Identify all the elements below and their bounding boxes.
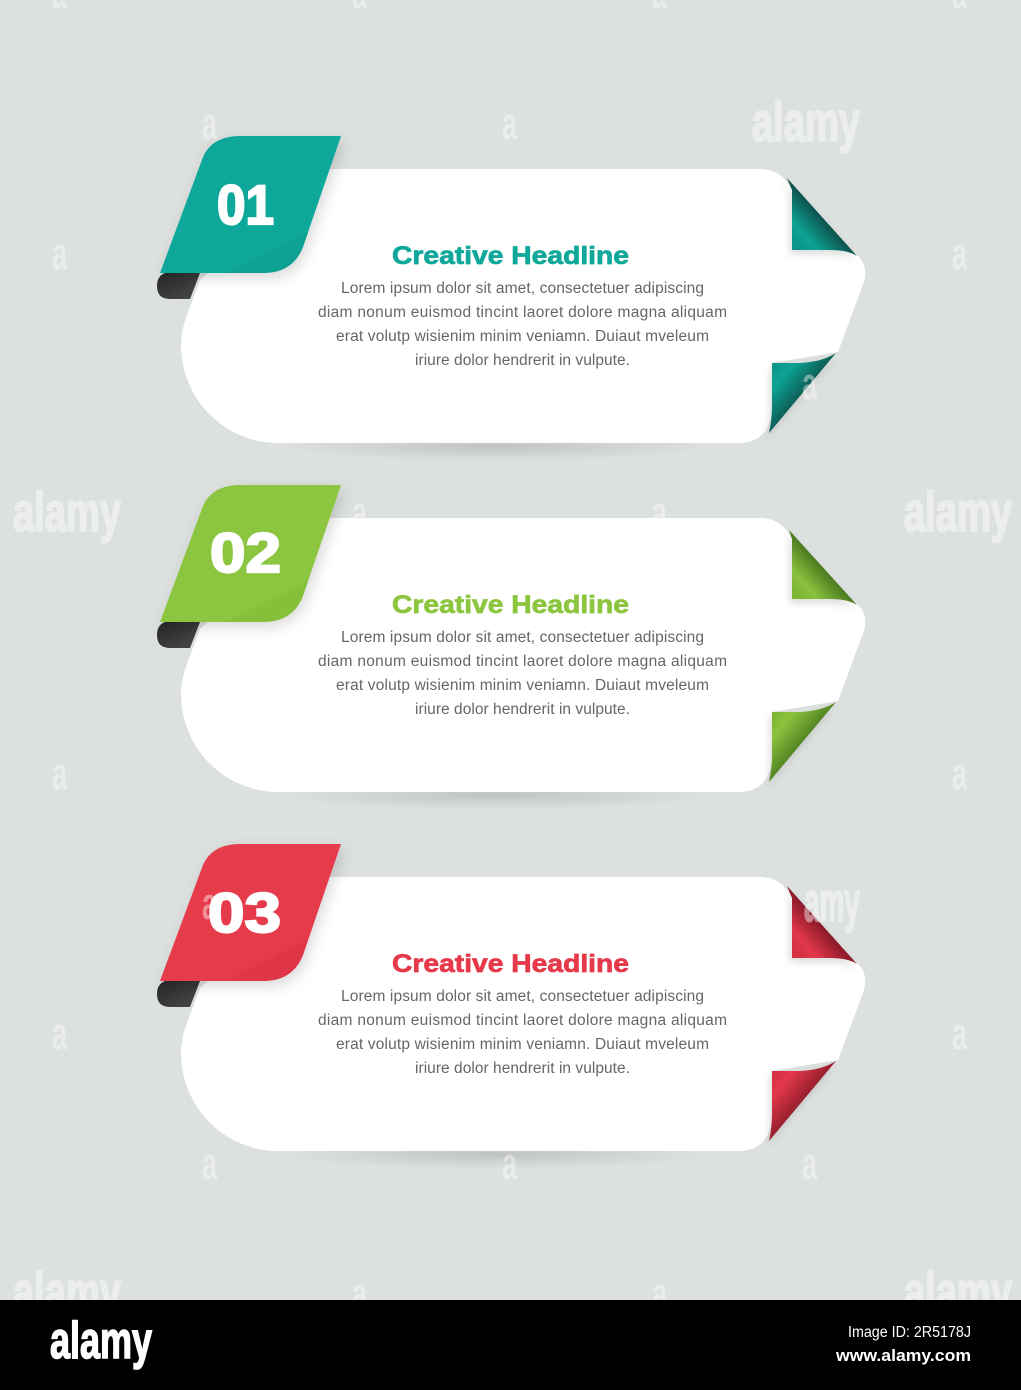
watermarks: a [202, 98, 218, 149]
body text: diam nonum euismod tincint laoret dolore magna aliquam [318, 304, 727, 321]
page curl bottom [769, 353, 836, 433]
white card [181, 518, 865, 792]
number label: 03 [208, 881, 281, 944]
heading: Creative Headline [392, 242, 629, 270]
body text: Lorem ipsum dolor sit amet, consectetuer adipiscing [341, 629, 704, 646]
watermarks: a [502, 1138, 518, 1189]
body text: diam nonum euismod tincint laoret dolore magna aliquam [318, 653, 727, 670]
body text: iriure dolor hendrerit in vulpute. [415, 1060, 630, 1077]
body text: Lorem ipsum dolor sit amet, consectetuer adipiscing [341, 280, 704, 297]
heading: Creative Headline [392, 950, 629, 978]
card shadow [280, 1139, 710, 1169]
watermarks: a [352, 487, 368, 538]
body text: diam nonum euismod tincint laoret dolore magna aliquam [318, 1012, 727, 1029]
watermarks: a [202, 878, 218, 929]
body text [318, 629, 727, 718]
ribbon tail [157, 981, 200, 1007]
page curl top [789, 530, 857, 605]
body text [318, 280, 727, 369]
page curl bottom [769, 702, 836, 782]
watermarks: a [652, 487, 668, 538]
watermarks: a [952, 748, 968, 799]
number label: 01 [217, 173, 274, 236]
body text: iriure dolor hendrerit in vulpute. [415, 352, 630, 369]
watermarks: a [802, 358, 818, 409]
watermarks: alamy [13, 1260, 121, 1323]
body text [318, 988, 727, 1077]
watermarks: a [802, 1138, 818, 1189]
body text: iriure dolor hendrerit in vulpute. [415, 701, 630, 718]
number label [160, 485, 341, 622]
watermarks: a [52, 748, 68, 799]
watermarks: a [502, 98, 518, 149]
panel: step 02 [157, 485, 865, 810]
page curl bottom [769, 1061, 836, 1141]
website: www.alamy.com [835, 1347, 971, 1365]
watermarks: amy [804, 870, 860, 933]
panel: step 01 [157, 136, 865, 461]
page curl top [787, 886, 857, 964]
white card [181, 169, 865, 443]
watermarks: a [952, 1008, 968, 1059]
body text: erat volutp wisienim minim veniamn. Duiaut mveleum [336, 328, 709, 345]
card shadow [280, 431, 710, 461]
watermarks: a [652, 1268, 668, 1319]
white card [181, 877, 865, 1151]
footer bar [0, 1300, 1021, 1390]
ribbon tail [157, 273, 200, 299]
body text: Lorem ipsum dolor sit amet, consectetuer adipiscing [341, 988, 704, 1005]
ribbon tail [157, 622, 200, 648]
watermarks: a [202, 1138, 218, 1189]
number label [160, 136, 341, 273]
image id: Image ID: 2R5178J [848, 1324, 971, 1341]
panel: step 03 [157, 844, 865, 1169]
watermarks: alamy [752, 90, 860, 153]
page curl top [787, 178, 857, 256]
heading: Creative Headline [392, 591, 629, 619]
watermarks: a [352, 1268, 368, 1319]
watermarks: a [952, 228, 968, 279]
watermarks: alamy [13, 480, 121, 543]
body text: erat volutp wisienim minim veniamn. Duiaut mveleum [336, 1036, 709, 1053]
number label [160, 844, 341, 981]
body text: erat volutp wisienim minim veniamn. Duiaut mveleum [336, 677, 709, 694]
footer logo: alamy [50, 1312, 152, 1370]
watermarks: a [52, 228, 68, 279]
number label: 02 [210, 521, 281, 584]
watermarks: a [52, 1008, 68, 1059]
card shadow [280, 780, 710, 810]
